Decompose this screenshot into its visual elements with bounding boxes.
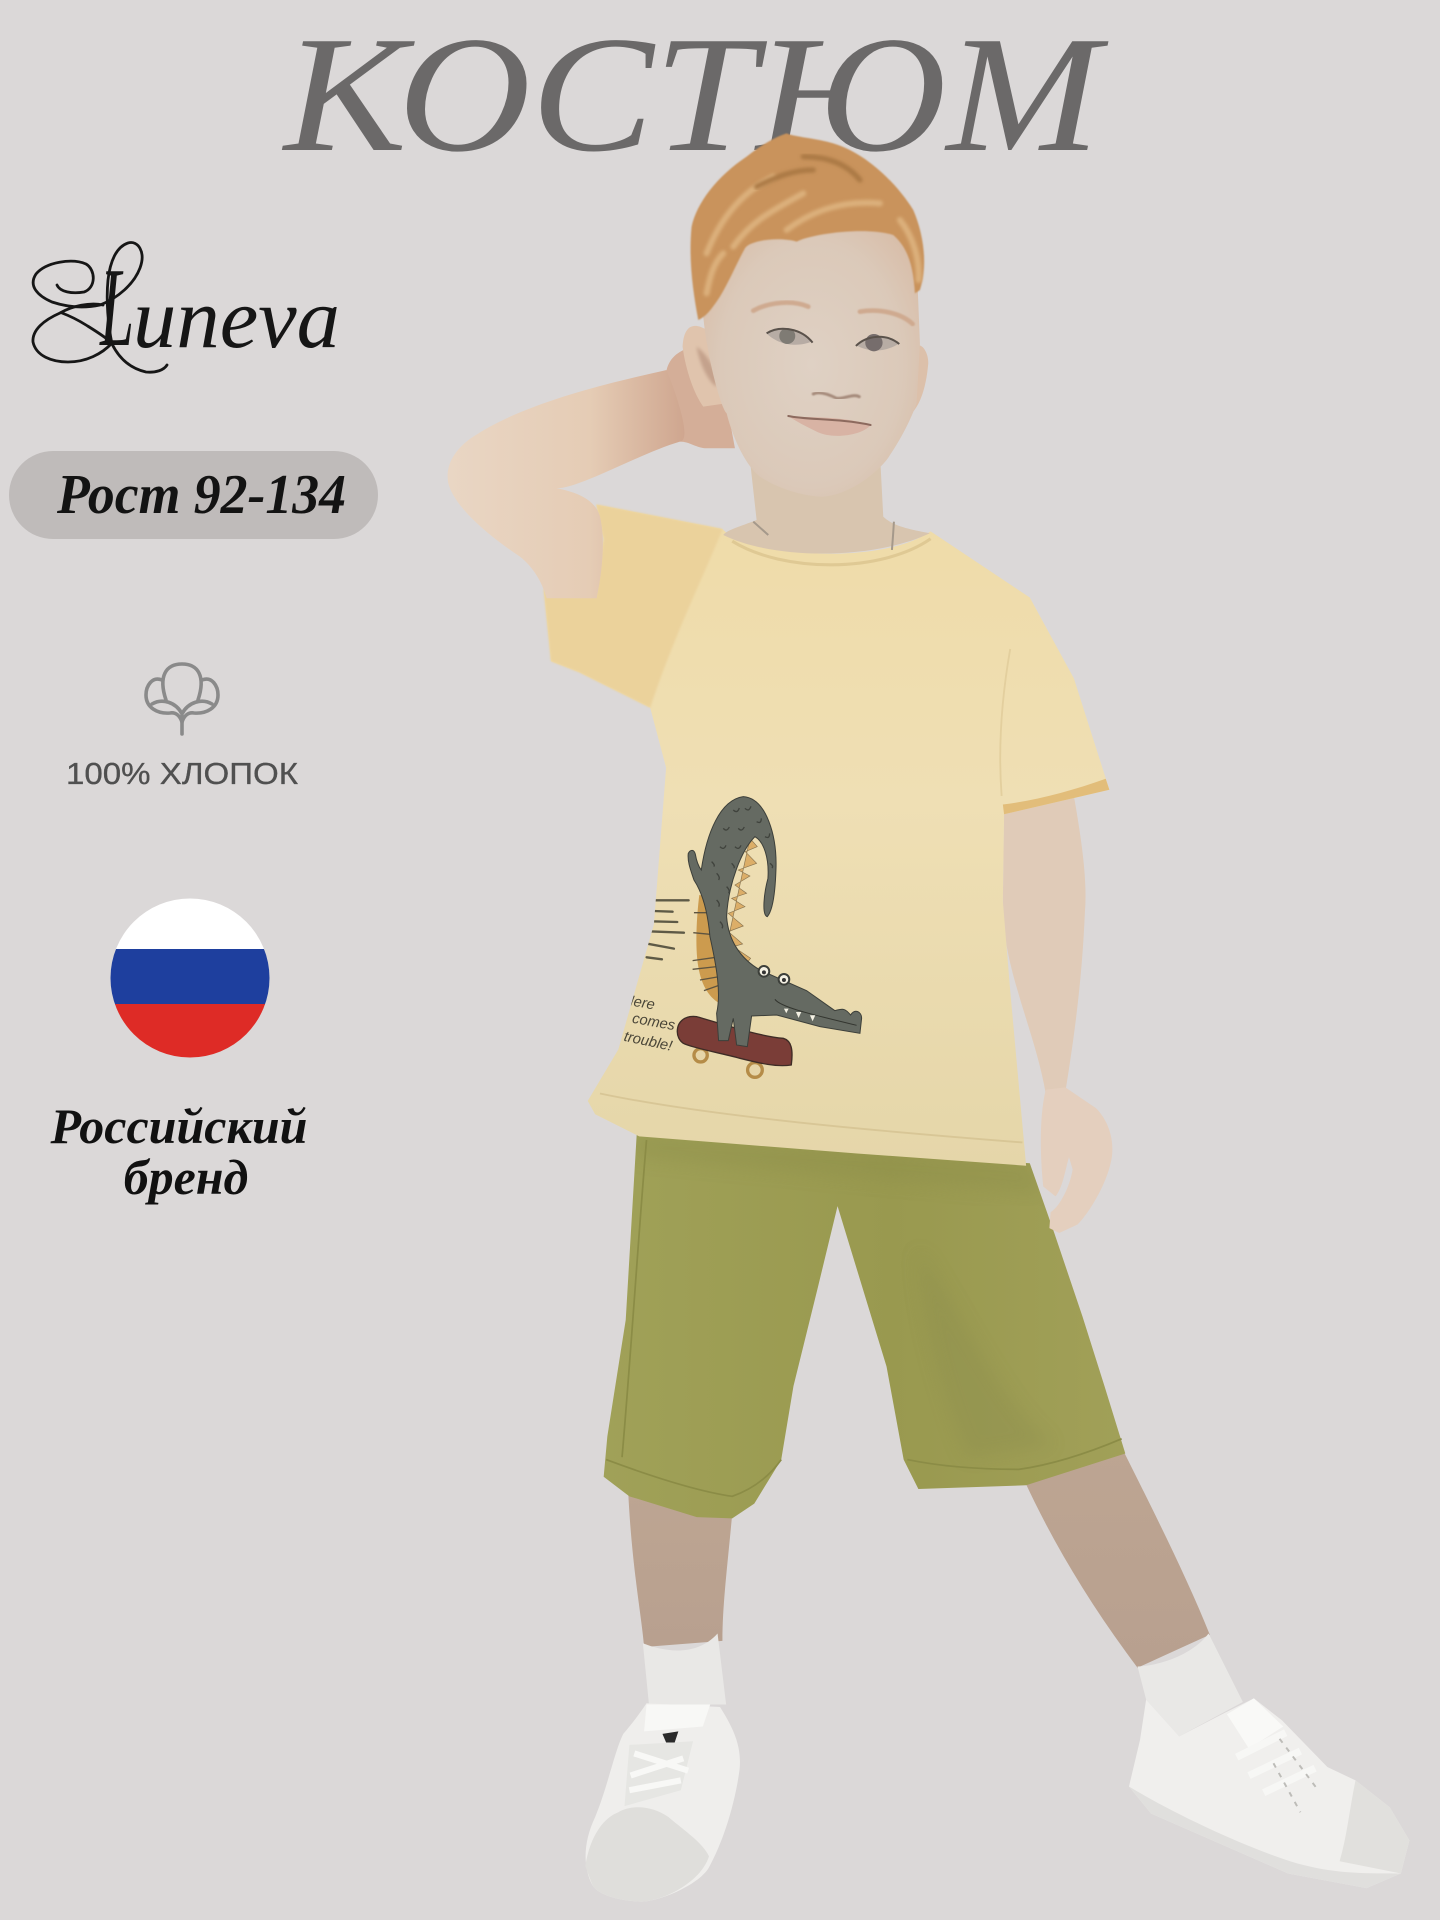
brand logo: Luneva: [33, 243, 340, 372]
print: slogan: [624, 996, 675, 1050]
caption: russian brand: бренд: [124, 1149, 248, 1205]
print: scales: [712, 806, 773, 928]
caption: russian brand: [50, 1098, 307, 1205]
print: skateboard: [677, 1016, 792, 1066]
icon: cotton boll: [146, 664, 218, 734]
print: wheels: [694, 1049, 762, 1077]
print: small teeth: [784, 1009, 815, 1021]
nose: [813, 393, 859, 398]
illustration: boy in t-shirt and shorts: [448, 133, 1409, 1902]
necklace: [753, 522, 894, 550]
print: mouth line: [775, 999, 857, 1025]
raised arm: [448, 370, 684, 598]
t-shirt: raised sleeve: [544, 504, 722, 708]
print: slogan: trouble!: [622, 1029, 674, 1055]
print: teeth: [727, 838, 757, 963]
right shoe: [1129, 1698, 1409, 1888]
height badge: Рост 92-134: [56, 464, 346, 526]
raised arm and head: [448, 133, 930, 598]
t-shirt: [544, 504, 1109, 1166]
left sock: [643, 1633, 726, 1704]
title: КОСТЮМ: [282, 2, 1109, 186]
hair: [691, 133, 924, 320]
right hand: [1041, 1087, 1112, 1233]
print: slogan: Here: [622, 992, 656, 1013]
neck: [723, 453, 930, 554]
print: crocodile body: [688, 797, 862, 1047]
print: speed lines: [645, 900, 689, 959]
eyebrows: [753, 303, 913, 324]
mouth: [788, 416, 871, 436]
left shoe: [585, 1703, 740, 1902]
print: eyes: [759, 966, 789, 985]
eyes: [767, 328, 899, 351]
print: slogan: comes: [631, 1011, 677, 1034]
brand logo: Luneva: L: [99, 246, 134, 370]
right arm: [1003, 796, 1086, 1093]
right sock: [1138, 1633, 1243, 1736]
icon: russian flag: [110, 898, 270, 1058]
face: [703, 203, 920, 497]
print: belly: [696, 895, 718, 1002]
cotton label: 100% ХЛОПОК: [66, 756, 298, 791]
t-shirt: sleeve underside: [1003, 779, 1109, 814]
brand logo: Luneva: uneva: [133, 270, 340, 366]
height badge: [9, 451, 378, 539]
shirt print: crocodile on a skateboard: [622, 797, 862, 1077]
shorts: [604, 1134, 1125, 1518]
caption: russian brand: Российский: [50, 1098, 307, 1154]
left leg: [628, 1491, 732, 1647]
raised hand: [667, 347, 735, 448]
right leg: [1024, 1447, 1210, 1668]
left ear: [683, 326, 727, 407]
right ear: [907, 345, 928, 413]
